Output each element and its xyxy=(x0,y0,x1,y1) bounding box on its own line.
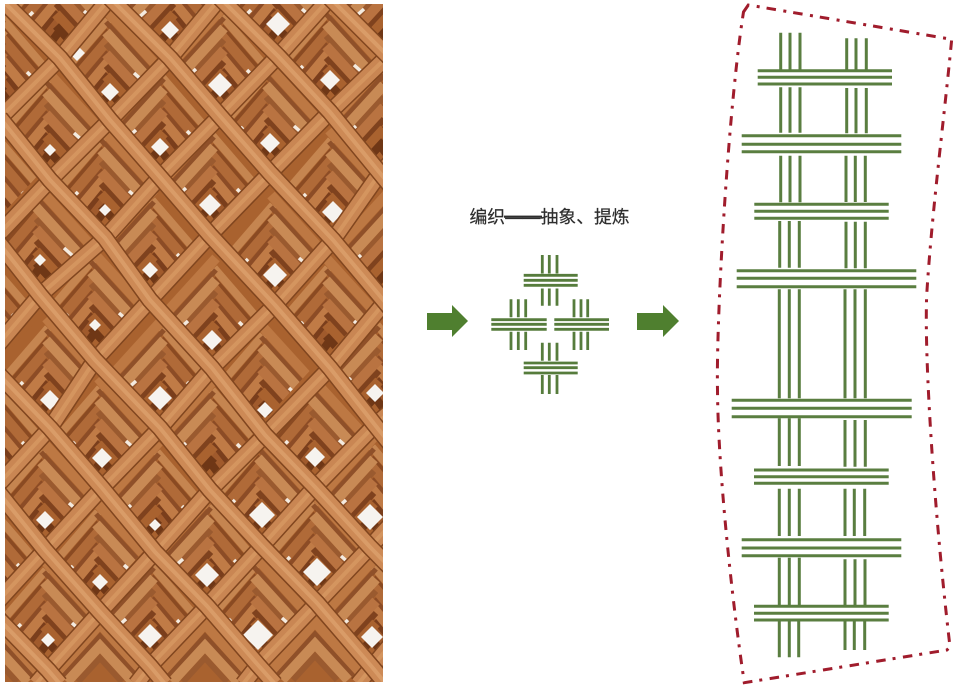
white gaps between the strips xyxy=(34,12,384,650)
heading: weaving abstraction caption: 编织——抽象、提炼 xyxy=(470,207,630,227)
motif unit: right xyxy=(554,299,609,350)
lattice bars xyxy=(5,4,383,682)
diagram: facade weave pattern xyxy=(732,33,916,657)
right vertical strip group xyxy=(845,38,866,650)
motif unit: bottom xyxy=(524,343,578,394)
motif unit: left xyxy=(491,299,547,350)
horizontal strip groups xyxy=(732,71,916,620)
motif unit: top xyxy=(524,255,578,306)
left vertical strip group xyxy=(779,33,800,657)
arrow: photo to abstraction xyxy=(427,305,468,337)
diagram: abstracted weave motif xyxy=(491,255,609,394)
outline: red dash-dot site boundary xyxy=(717,5,952,683)
photo: woven bamboo lattice panel xyxy=(5,4,383,682)
arrow: abstraction to facade pattern xyxy=(637,305,679,337)
woven chevron cells xyxy=(5,4,383,682)
